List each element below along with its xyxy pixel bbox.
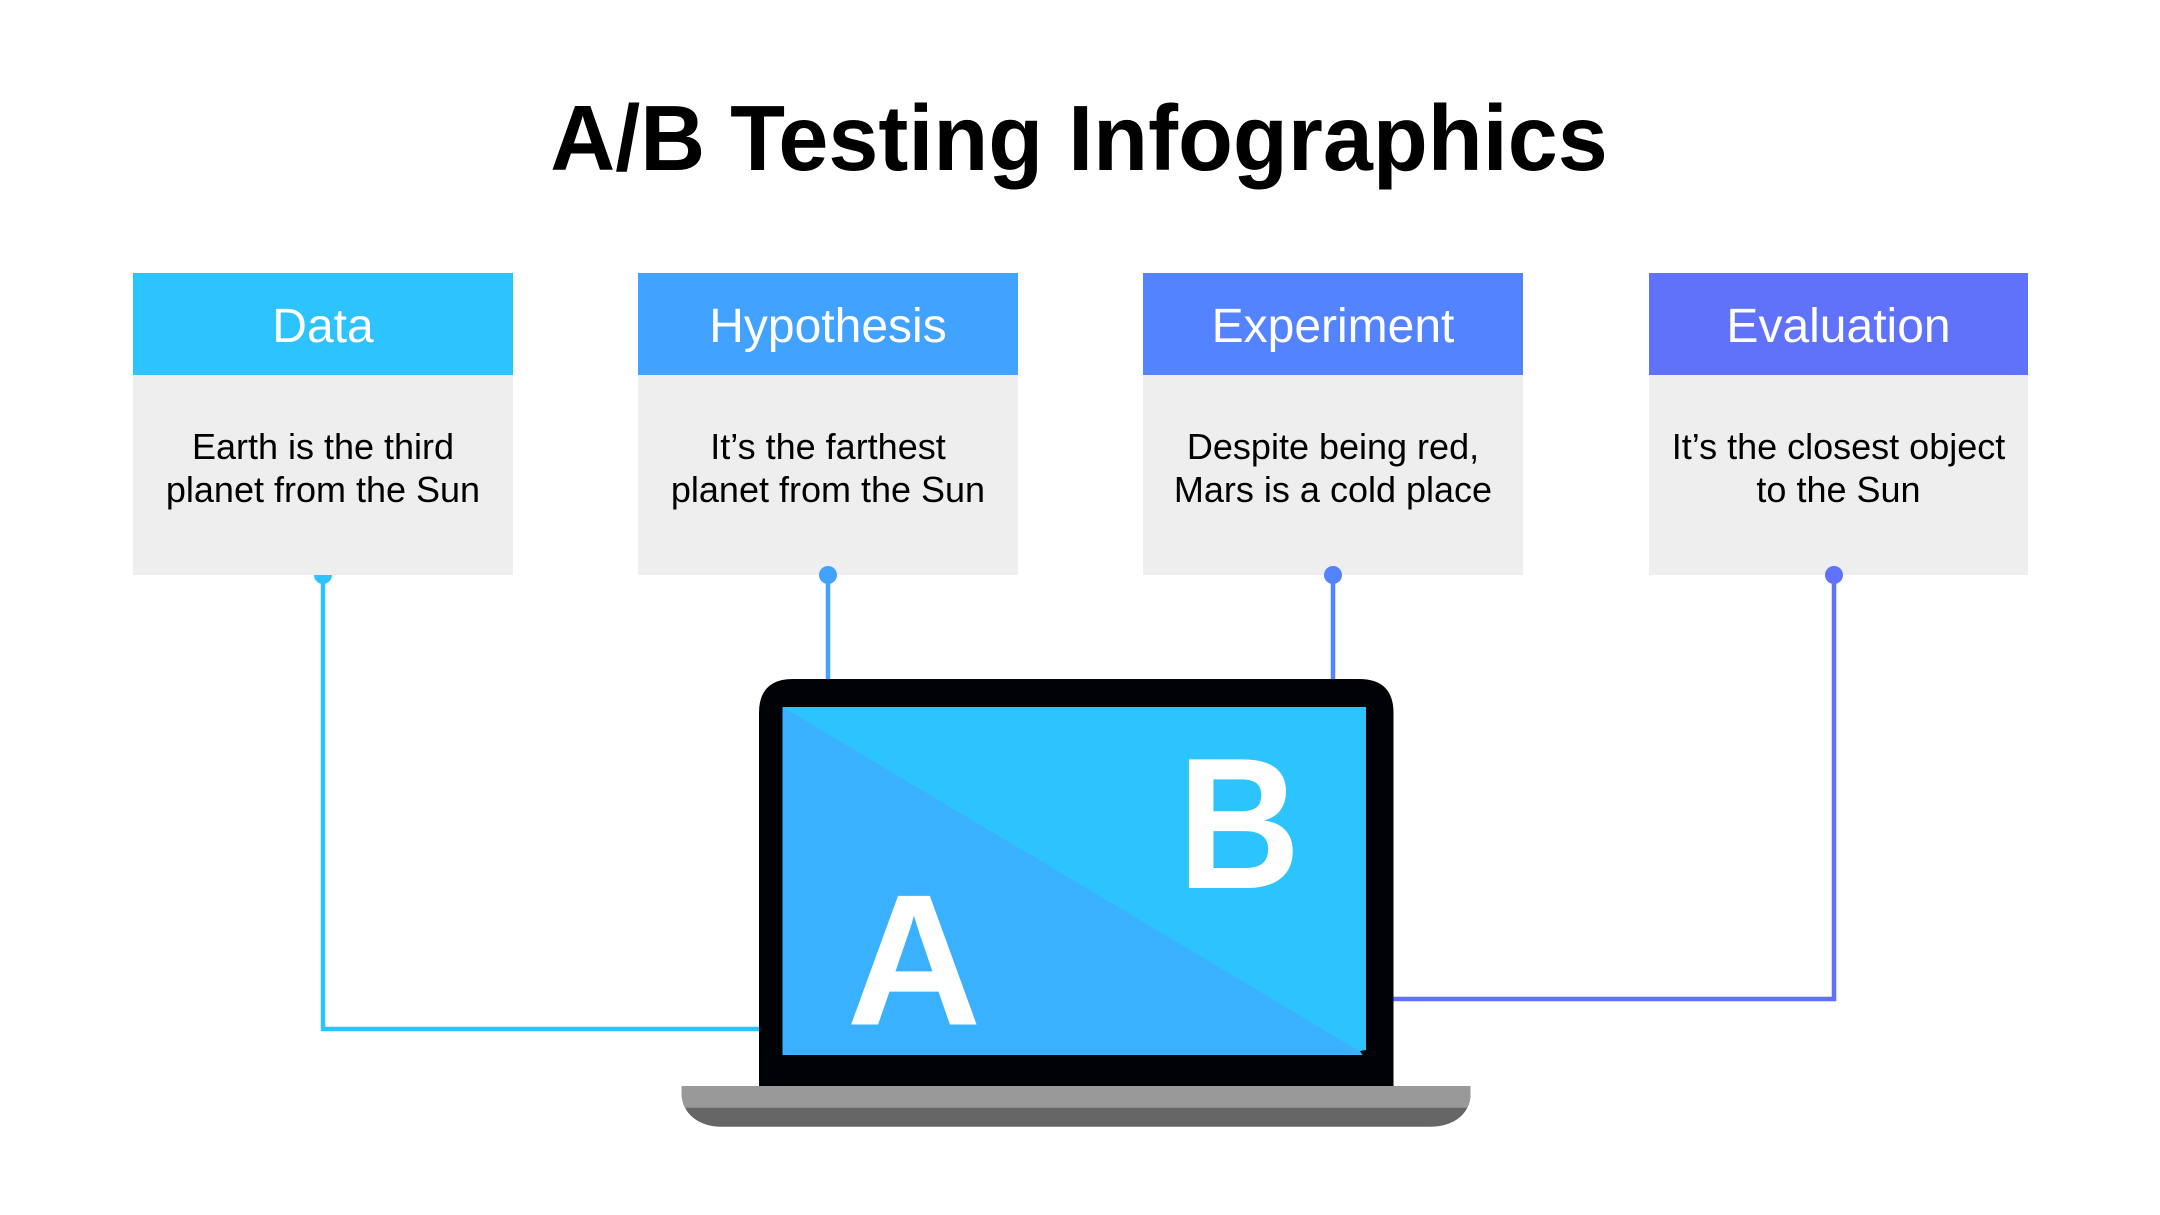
header: Data [133, 273, 513, 375]
title: A/B Testing Infographics [550, 87, 1608, 190]
heading: Hypothesis: Hypothesis [709, 300, 947, 353]
connector: Experiment to laptop [1331, 575, 1335, 685]
panel: Experiment [1143, 273, 1523, 584]
card body: Data [133, 375, 513, 575]
text: Data description: planet from the Sun [166, 469, 480, 510]
screen: side B [782, 707, 1366, 1055]
header: Experiment [1143, 273, 1523, 375]
text: Hypothesis description: It’s the farthest [710, 426, 946, 467]
connector: Data to laptop [314, 566, 765, 1029]
base bottom shade [682, 1086, 1470, 1127]
connector dot: Evaluation [1825, 566, 1843, 584]
card body: Evaluation [1649, 375, 2028, 575]
panel: Hypothesis [638, 273, 1018, 584]
text: Experiment description: Mars is a cold place [1174, 469, 1492, 510]
laptop illustration [682, 679, 1470, 1127]
connector dot: Experiment [1324, 566, 1342, 584]
connector dot: Hypothesis [819, 566, 837, 584]
heading: Data: Data [272, 300, 374, 353]
base top surface [682, 1086, 1470, 1108]
connector: Evaluation to laptop [1390, 575, 1834, 999]
letter A: A [846, 856, 982, 1064]
header: Hypothesis [638, 273, 1018, 375]
panel: Data [133, 273, 513, 575]
connector: Hypothesis to laptop [826, 575, 830, 685]
heading: Evaluation: Evaluation [1726, 300, 1951, 353]
card body: Experiment [1143, 375, 1523, 575]
text: Experiment description: Despite being red, [1187, 426, 1479, 467]
heading: Experiment: Experiment [1212, 300, 1454, 353]
panel: Evaluation [1649, 273, 2028, 584]
text: Data description: Earth is the third [192, 426, 454, 467]
text: Evaluation description: It’s the closest object [1672, 426, 2005, 467]
letter B: B [1178, 719, 1300, 928]
laptop base [682, 1086, 1470, 1127]
header: Evaluation [1649, 273, 2028, 375]
card body: Hypothesis [638, 375, 1018, 575]
laptop lid [759, 679, 1394, 1087]
screen: side A [782, 707, 1366, 1055]
text: Evaluation description: to the Sun [1756, 469, 1921, 510]
text: Hypothesis description: planet from the Sun [671, 469, 985, 510]
